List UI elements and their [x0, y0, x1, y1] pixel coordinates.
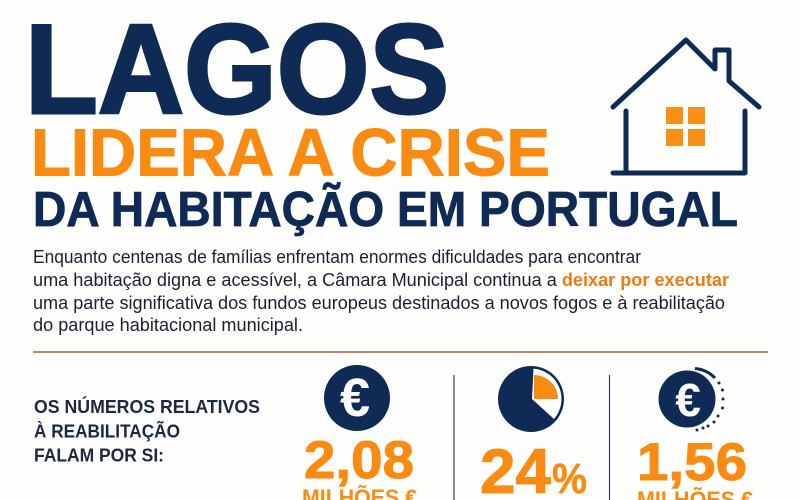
value: 1,56: 1,56 [637, 433, 747, 492]
value: 2,08: 2,08 [304, 431, 414, 490]
intro paragraph: uma parte significativa dos fundos europeus destinados a novos fogos e à reabilitação [33, 293, 725, 313]
icon: euro coin [324, 365, 390, 431]
subtitle: da habitação em Portugal: DA HABITAÇÃO EM PORTUGAL [33, 181, 738, 237]
subtitle: lidera a crise: LIDERA A CRISE [31, 116, 550, 190]
intro paragraph: do parque habitacional municipal. [33, 315, 303, 335]
section heading: OS NÚMEROS RELATIVOS [34, 396, 260, 417]
title: Lagos: LAGOS [25, 0, 449, 140]
intro paragraph: Enquanto centenas de famílias enfrentam enormes dificuldades para encontrar [33, 247, 641, 267]
intro paragraph [33, 247, 729, 335]
stat: 2,08 milhões [302, 365, 417, 500]
icon: euro coin: € [340, 368, 370, 428]
icon: euro coin with progress ring [658, 368, 724, 432]
stat: 1,56 milhões [637, 368, 753, 500]
section heading [34, 396, 260, 466]
stat: 24% [480, 366, 587, 500]
icon: pie chart [498, 366, 564, 432]
intro paragraph: uma habitação digna e acessível, a Câmara Municipal continua a deixar por executar [33, 270, 729, 290]
section heading: À REABILITAÇÃO [34, 420, 180, 442]
icon: house [613, 40, 759, 173]
section heading: FALAM POR SI: [34, 446, 164, 466]
value: 24% [480, 437, 587, 500]
icon: euro coin with progress ring: € [675, 374, 701, 426]
